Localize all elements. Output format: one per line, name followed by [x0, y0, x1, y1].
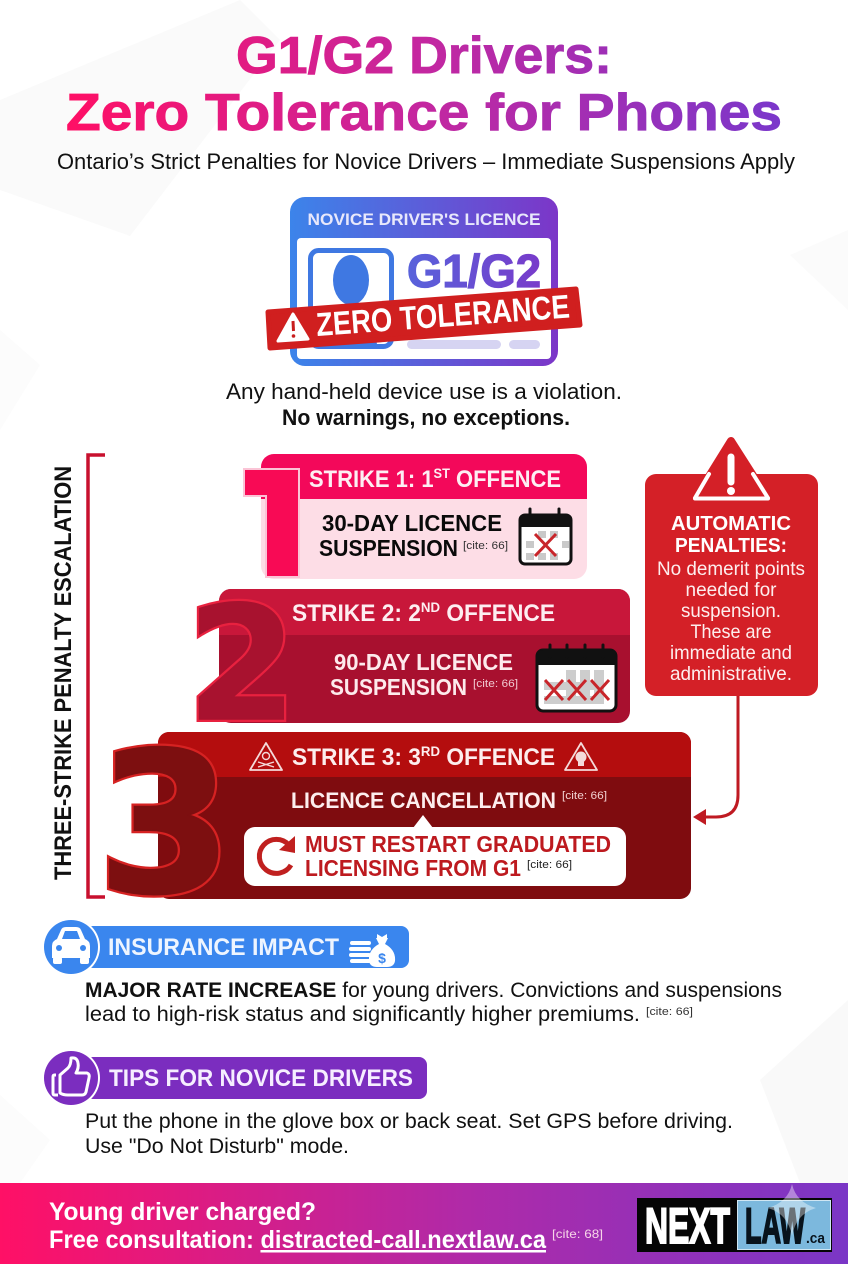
icon: calendar three crosses	[537, 645, 616, 711]
numeral 1: 1	[230, 442, 331, 611]
card class G1/G2: G1/G2	[407, 245, 541, 297]
escalation bracket	[88, 455, 105, 897]
numeral 2: 2	[187, 573, 297, 757]
numeral 3: 3	[97, 711, 233, 939]
callout heading	[671, 513, 791, 557]
licence card illustration	[268, 197, 580, 366]
icon: portrait photo	[310, 250, 392, 346]
strike 2 heading: STRIKE 2: 2	[292, 600, 428, 627]
callout body: No demerit points	[657, 558, 805, 580]
numeral 1	[243, 468, 300, 578]
icon: calendar one cross	[520, 509, 571, 564]
tips text: Put the phone in the glove box or back seat. Set GPS before driving.	[85, 1109, 733, 1133]
panel: strike 3	[97, 711, 691, 939]
call to action: Free consultation: distracted-call.nextlaw.ca	[49, 1226, 547, 1254]
call to action	[49, 1198, 547, 1254]
strike 2 penalty: 90-DAY LICENCE	[334, 649, 513, 675]
citation: [cite: 66]	[463, 540, 508, 552]
tips heading	[42, 1049, 427, 1107]
restart callout	[244, 815, 626, 886]
licence cancellation text: LICENCE CANCELLATION	[291, 788, 556, 813]
tips text	[85, 1109, 733, 1158]
strike 1 heading: STRIKE 1: 1	[309, 466, 445, 493]
callout heading: PENALTIES:	[675, 535, 787, 557]
insurance text	[85, 978, 782, 1026]
icon: thumbs up	[53, 1058, 89, 1095]
callout body: needed for	[686, 579, 777, 601]
strike 1 heading: ST	[434, 465, 450, 481]
insurance title: INSURANCE IMPACT	[108, 934, 339, 961]
citation: [cite: 66]	[562, 790, 607, 802]
panel: strike 1	[243, 454, 587, 579]
panel: strike 2	[187, 573, 630, 757]
icon: restart arrow	[259, 836, 295, 873]
callout body: immediate and	[670, 642, 792, 664]
icon: coins and money bag	[351, 934, 395, 967]
icon: skull warning right	[565, 743, 597, 770]
title: G1/G2 Drivers:	[236, 27, 612, 85]
insurance text: MAJOR RATE INCREASE for young drivers. Convictions and suspensions	[85, 978, 782, 1002]
restart text: LICENSING FROM G1	[305, 855, 521, 881]
strike 3 heading: OFFENCE	[440, 744, 555, 771]
strike 1 penalty: SUSPENSION	[319, 535, 458, 561]
footer band	[0, 1183, 848, 1264]
restart text	[305, 831, 611, 881]
strike 2 penalty: SUSPENSION	[330, 674, 467, 700]
logo: Next Law: .ca	[806, 1230, 826, 1247]
callout body: These are	[690, 621, 772, 643]
card heading: NOVICE DRIVER'S LICENCE	[308, 210, 540, 229]
licence caption	[226, 379, 622, 430]
citation: [cite: 66]	[527, 859, 572, 871]
insurance text: lead to high-risk status and significantly higher premiums.	[85, 1002, 640, 1026]
panel: automatic penalties callout	[645, 441, 818, 696]
callout body: suspension.	[681, 600, 781, 622]
sparkle	[768, 1184, 816, 1236]
zero tolerance banner	[268, 287, 580, 348]
subtitle: Ontario’s Strict Penalties for Novice Drivers – Immediate Suspensions Apply	[57, 149, 795, 174]
numeral 2: 2	[187, 573, 297, 757]
strike 1 penalty	[319, 510, 502, 561]
icon: warning triangle	[278, 314, 308, 341]
numeral 3: 3	[97, 711, 233, 939]
call to action: Young driver charged?	[49, 1198, 316, 1226]
callout body	[657, 558, 805, 685]
citation: [cite: 66]	[473, 678, 518, 690]
arrow: callout to strike 3	[693, 696, 738, 825]
strike 2 heading: ND	[421, 599, 440, 615]
icon: skull warning left	[250, 743, 282, 770]
banner text: ZERO TOLERANCE	[315, 287, 571, 343]
icon: car	[52, 927, 90, 964]
insurance heading	[42, 918, 409, 976]
title: Zero Tolerance for Phones	[66, 84, 782, 142]
strike 3 heading: RD	[421, 743, 440, 759]
callout body: administrative.	[670, 663, 792, 685]
callout heading: AUTOMATIC	[671, 513, 791, 535]
insurance text: [cite: 66]	[646, 1006, 693, 1018]
logo: Next Law	[637, 1198, 832, 1254]
strike 3 heading: STRIKE 3: 3	[292, 744, 428, 771]
tips title: TIPS FOR NOVICE DRIVERS	[109, 1065, 413, 1092]
citation: [cite: 68]	[552, 1227, 603, 1241]
strike 2 heading: OFFENCE	[440, 600, 555, 627]
icon: warning triangle	[695, 441, 768, 499]
strike 1 heading: OFFENCE	[450, 466, 561, 493]
title	[66, 27, 782, 142]
strike 2 penalty	[330, 649, 513, 700]
tips text: Use "Do Not Disturb" mode.	[85, 1134, 349, 1158]
logo: Next Law: NEXT	[645, 1198, 730, 1254]
numeral 1: 1	[230, 442, 331, 611]
restart text: MUST RESTART GRADUATED	[305, 831, 611, 857]
licence caption: Any hand-held device use is a violation.	[226, 379, 622, 404]
icon: coins and money bag: $	[378, 950, 386, 966]
licence caption: No warnings, no exceptions.	[282, 405, 570, 430]
strike 1 penalty: 30-DAY LICENCE	[322, 510, 502, 536]
vertical escalation label: THREE-STRIKE PENALTY ESCALATION	[50, 466, 77, 880]
